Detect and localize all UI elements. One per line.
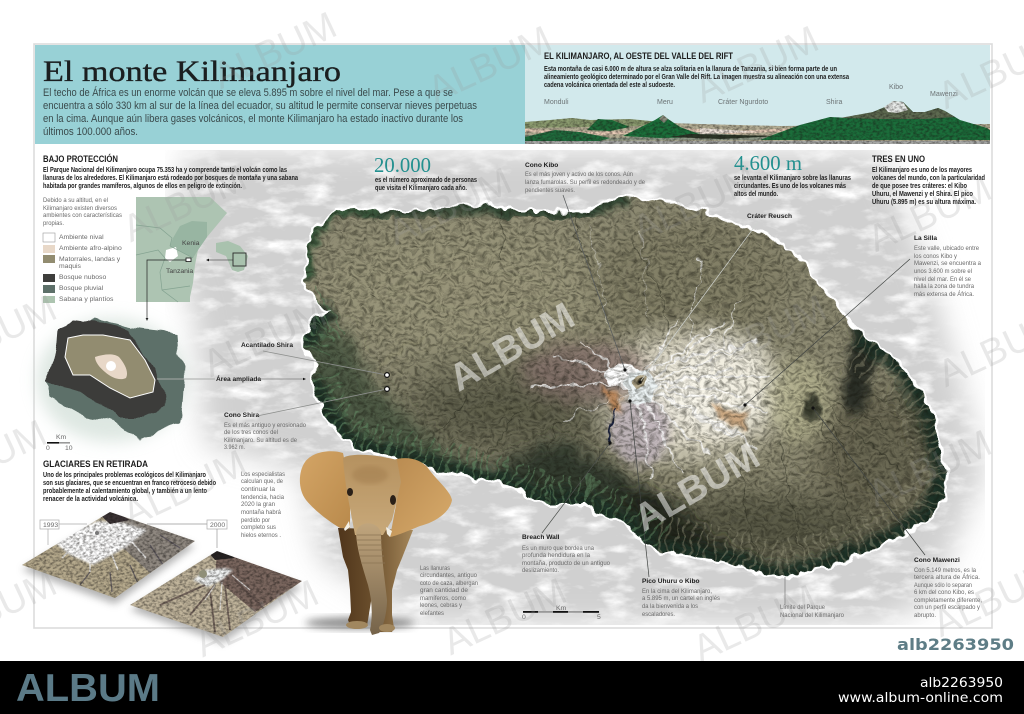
scale: Km zone map: 10 xyxy=(65,445,73,452)
callout: Cono Mawenzi: con un perfil escarpado y xyxy=(914,604,981,611)
footer id and site: www.album-online.com xyxy=(838,690,1003,706)
summit ice cap xyxy=(606,363,655,405)
rift text: Esta montaña de casi 6.000 m de altura se alza solitaria en la llanura de Tanzania, si bien forma parte de un xyxy=(544,66,837,73)
callout: Cono Kibo: lanza fumarolas. Su perfil es redondeado y de xyxy=(525,179,645,186)
text: ambientes intro xyxy=(43,197,123,227)
legend of environments: Bosque nuboso xyxy=(59,274,106,281)
text: surrounding plains: leones, cebras y xyxy=(420,602,463,609)
text: specialists forecast: 2020 la gran xyxy=(241,501,275,508)
rift text: alineamiento geológico determinado por el Gran Valle del Rift. La imagen muestra su alineación con una extensa xyxy=(544,74,849,81)
scale: Km zone map: 0 xyxy=(46,445,50,452)
callout: Cono Shira: de los tres conos del xyxy=(224,429,278,436)
text: surrounding plains: mamíferos, como xyxy=(420,595,466,602)
text: specialists forecast: tendencia, hacia xyxy=(241,494,284,501)
callout: Cono Mawenzi: tercera altura de África. xyxy=(914,572,980,581)
title: El monte Kilimanjaro xyxy=(43,55,341,88)
watermarks: ALBUM xyxy=(697,287,833,381)
text: ambientes intro: propias. xyxy=(43,220,64,227)
watermarks: ALBUM xyxy=(197,292,333,386)
intro text: en la cima. Aunque aún libera gases volcánicos, el monte Kilimanjaro ha estado inactivo durante los xyxy=(43,113,463,125)
intro text: últimos 100.000 años. xyxy=(43,126,138,138)
watermarks: ALBUM xyxy=(627,435,767,540)
stat: 4.600 m height: altos del mundo. xyxy=(734,191,778,198)
text block: Glaciares en retirada: GLACIARES EN RETIRADA xyxy=(43,458,148,469)
callout: Breach Wall: montaña, producto de un antiguo xyxy=(522,560,610,567)
intro text: El techo de África es un enorme volcán que se eleva 5.895 m sobre el nivel del mar. Pese a que se xyxy=(43,86,453,99)
text block: Tres en uno: Uhuru (5.895 m) es su altura máxima. xyxy=(872,199,976,206)
elephant left ear xyxy=(300,451,350,528)
callout: Breach Wall: profunda hendidura en la xyxy=(522,552,590,559)
glacier block 2000 xyxy=(128,550,306,643)
bright snow and lava zone around Kibo xyxy=(580,312,788,476)
watermarks: ALBUM xyxy=(207,4,343,98)
callout: Cono Kibo: Cono Kibo xyxy=(525,162,558,169)
text block: Glaciares en retirada: Uno de los principales problemas ecológicos del Kilimanjaro xyxy=(43,472,206,479)
scale: Km zone map: Km xyxy=(56,434,67,441)
text block: Bajo proteccion xyxy=(43,153,298,190)
callout: Cono Shira xyxy=(224,387,389,451)
text: specialists forecast: montaña habrá xyxy=(241,509,281,516)
footer id and site xyxy=(838,675,1003,706)
tusks and eyes xyxy=(344,521,350,531)
watermarks: ALBUM xyxy=(117,442,253,536)
text: specialists forecast: Los especialistas xyxy=(241,471,286,478)
text: specialists forecast: continuar la xyxy=(241,486,275,493)
callout: Acantilado Shira: Acantilado Shira xyxy=(241,342,293,349)
year labels xyxy=(40,520,227,548)
callout: Breach Wall xyxy=(522,441,612,574)
text: ambientes intro: Debido a su altitud, en el xyxy=(43,197,108,204)
watermarks: ALBUM xyxy=(422,18,558,112)
watermarks: ALBUM xyxy=(862,167,998,261)
rift text: cadena volcánica orientada del este al sudoeste. xyxy=(544,82,675,89)
text block: Tres en uno: volcanes del mundo, con la particularidad xyxy=(872,175,985,182)
text: surrounding plains: gran cantidad de xyxy=(420,587,468,594)
panorama labels: Shira xyxy=(826,99,842,106)
locator map: Kenya and Tanzania: Tanzania xyxy=(166,268,193,275)
callout: Cono Shira: Es el más antiguo y erosionado xyxy=(224,422,306,429)
plains relief background xyxy=(165,150,985,625)
watermarks: ALBUM xyxy=(627,157,763,251)
callout: Pico Uhuru o Kibo: En la cima del Kilimanjaro, xyxy=(642,588,712,595)
callout: Cono Shira: 3.962 m. xyxy=(224,444,245,451)
elephant body and legs xyxy=(338,528,413,632)
callout: La Silla: La Silla xyxy=(914,235,937,242)
callout: Cono Shira: Cono Shira xyxy=(224,412,260,419)
callout: Cono Mawenzi: 6 km del cono Kibo, es xyxy=(914,589,975,596)
stat: 20.000 visitors: 20.000 xyxy=(374,153,431,177)
callout: Cono Mawenzi: Cono Mawenzi xyxy=(914,557,960,564)
legend of environments: Sabana y plantíos xyxy=(59,296,114,303)
text block: Tres en uno xyxy=(872,153,985,206)
callout: Cono Kibo xyxy=(525,162,645,372)
vegetation zone map xyxy=(37,318,187,442)
watermarks: ALBUM xyxy=(382,160,518,254)
watermarks: ALBUM xyxy=(437,570,573,664)
rift heading: EL KILIMANJARO, AL OESTE DEL VALLE DEL RIFT xyxy=(544,50,733,61)
glacier block 1993 xyxy=(20,510,200,604)
callout: Cono Mawenzi: abrupto. xyxy=(914,612,936,619)
text block: Bajo proteccion: habitada por grandes mamíferos, algunos de ellos en peligro de extinción. xyxy=(43,183,242,190)
text: surrounding plains: elefantes xyxy=(420,610,445,617)
callout: La Silla: los conos Kibo y xyxy=(914,253,958,260)
callout: Breach Wall: deslizamiento. xyxy=(522,567,559,574)
watermarks: ALBUM xyxy=(442,295,582,400)
callout: La Silla xyxy=(743,235,981,407)
elephant right ear xyxy=(390,458,452,537)
text block: Glaciares en retirada: renacer de la actividad volcánica. xyxy=(43,496,138,503)
legend of environments xyxy=(43,233,122,303)
callout: Breach Wall: Breach Wall xyxy=(522,534,560,541)
image id label: alb2263950 xyxy=(897,635,1014,654)
panorama labels: Meru xyxy=(657,99,673,106)
text block: Bajo proteccion: llanuras de los alrededores. El Kilimanjaro está rodeado por bosques de montaña y una sabana xyxy=(43,175,298,182)
elephant xyxy=(300,451,452,635)
panel: rift valley xyxy=(525,45,990,144)
text block: Tres en uno: TRES EN UNO xyxy=(872,153,925,164)
scale: Km zone map xyxy=(46,434,73,452)
watermarks: ALBUM xyxy=(117,157,253,251)
callout: Cono Mawenzi: Con 5.149 metros, es la xyxy=(914,567,976,574)
text: specialists forecast: calculan que, de xyxy=(241,478,283,485)
stat: 4.600 m height: se levanta el Kilimanjaro sobre las llanuras xyxy=(734,175,851,182)
callout: park limit: Nacional del Kilimanjaro xyxy=(780,612,844,619)
callout: Crater Reusch: Cráter Reusch xyxy=(747,213,792,220)
watermarks: ALBUM xyxy=(189,572,325,666)
intro text: encuentra a sólo 330 km al sur de la línea del ecuador, su altitud le permite conservar nieves perpetuas xyxy=(43,100,477,112)
callout: Pico Uhuru o Kibo: escaladores. xyxy=(642,611,675,618)
text: specialists forecast xyxy=(241,471,286,539)
callout: Crater Reusch xyxy=(638,213,792,384)
year labels: 1993 xyxy=(43,522,58,529)
stat: 20.000 visitors: que visita el Kilimanjaro cada año. xyxy=(375,185,467,192)
stat: 4.600 m height: circundantes. Es uno de los volcanes más xyxy=(734,183,846,190)
callout: Pico Uhuru o Kibo: Pico Uhuru o Kibo xyxy=(642,578,700,585)
text: surrounding plains xyxy=(420,565,478,617)
stat: 20.000 visitors xyxy=(374,153,477,192)
panorama labels xyxy=(544,84,958,106)
radial snow streaks xyxy=(530,225,770,480)
watermarks: ALBUM xyxy=(689,18,825,112)
locator map: Kenya and Tanzania: Kenia xyxy=(182,240,200,247)
text block: Glaciares en retirada: son sus glaciares, que se encuentran en franco retroceso debido xyxy=(43,480,216,487)
text block: Glaciares en retirada: probablemente al calentamiento global, y también a un lento xyxy=(43,488,207,495)
callout: Area ampliada: Área ampliada xyxy=(216,374,261,383)
callout: Pico Uhuru o Kibo: a 5.895 m, un cartel en inglés xyxy=(642,595,721,602)
footer bar xyxy=(0,661,1024,714)
scale: Km main map: 0 xyxy=(522,614,526,621)
text: specialists forecast: completo sus xyxy=(241,524,277,531)
legend of environments: Ambiente afro-alpino xyxy=(59,245,122,252)
footer id and site: alb2263950 xyxy=(920,675,1003,691)
legend of environments: Ambiente nival xyxy=(59,234,104,241)
edge fringe: forest ridges xyxy=(335,198,628,213)
rift text xyxy=(544,66,849,89)
panorama labels: Cráter Ngurdoto xyxy=(718,99,768,106)
text: surrounding plains: coto de caza, albergan xyxy=(420,580,478,587)
text: specialists forecast: perdido por xyxy=(241,517,271,524)
scale: Km main map: 5 xyxy=(597,614,601,621)
callout: Cono Mawenzi: completamente diferente, xyxy=(914,597,982,604)
callout: La Silla: Mawenzi, se encuentra a xyxy=(914,260,981,267)
satellite image of Kilimanjaro xyxy=(290,190,960,590)
text: surrounding plains: Las llanuras xyxy=(420,565,450,572)
legend of environments: maquis xyxy=(59,263,82,270)
callout: La Silla: nivel del mar. En él se xyxy=(914,276,971,283)
year labels: 2000 xyxy=(210,522,225,529)
callout: Cono Mawenzi xyxy=(811,406,982,619)
stat: 4.600 m height xyxy=(734,151,851,198)
panorama labels: Kibo xyxy=(889,84,903,91)
callout: Breach Wall: Es un muro que bordea una xyxy=(522,545,594,552)
callout: Cono Mawenzi: Aunque sólo lo separan xyxy=(914,582,972,589)
callout: park limit xyxy=(780,577,844,619)
text block: Glaciares en retirada xyxy=(43,458,216,503)
text block: Bajo proteccion: BAJO PROTECCIÓN xyxy=(43,153,118,164)
elephant head xyxy=(343,455,401,535)
footer logo: ALBUM xyxy=(16,667,160,710)
stat: 4.600 m height: 4.600 m xyxy=(734,151,802,175)
callout: Pico Uhuru o Kibo: da la bienvenida a los xyxy=(642,603,699,610)
watermarks: ALBUM xyxy=(862,422,998,516)
callout: La Silla: halla la zona de tundra xyxy=(914,283,974,290)
text: specialists forecast: hielos eternos . xyxy=(241,532,281,539)
panorama labels: Mawenzi xyxy=(930,91,958,98)
callout: park limit: Límite del Parque xyxy=(780,604,825,611)
text block: Tres en uno: Uhuru, el Mawenzi y el Shira. El pico xyxy=(872,191,973,198)
callout: Cono Kibo: pendientes suaves. xyxy=(525,187,575,194)
legend of environments: Bosque pluvial xyxy=(59,285,104,292)
title panel xyxy=(35,45,525,144)
callout: Cono Shira: Kilimanjaro. Su altitud es de xyxy=(224,437,297,444)
scale: Km main map: Km xyxy=(556,605,567,612)
elephant trunk xyxy=(356,523,387,635)
callout: La Silla: unos 3.600 m sobre el xyxy=(914,268,972,275)
panel frame xyxy=(34,44,992,628)
panorama of the volcanic chain xyxy=(525,101,990,144)
scale: Km main map xyxy=(522,605,601,621)
text: ambientes intro: Kilimanjaro existen diversos xyxy=(43,205,118,212)
callout: Pico Uhuru o Kibo xyxy=(628,399,721,618)
callout: Acantilado Shira xyxy=(241,342,389,377)
text block: Tres en uno: El Kilimanjaro es uno de los mayores xyxy=(872,167,972,174)
stat: 20.000 visitors: es el número aproximado de personas xyxy=(375,177,477,184)
callout: La Silla: más extensa de África. xyxy=(914,289,974,298)
text: ambientes intro: ambientes con características xyxy=(43,212,123,219)
intro text xyxy=(43,86,477,138)
text: surrounding plains: circundantes, antiguo xyxy=(420,572,477,579)
legend of environments: Matorrales, landas y xyxy=(59,256,121,263)
callout: Cono Kibo: Es el más joven y activo de los conos. Aún xyxy=(525,171,633,178)
panorama labels: Monduli xyxy=(544,99,569,106)
dark ravines xyxy=(430,212,900,560)
callout: La Silla: Este valle, ubicado entre xyxy=(914,245,979,252)
watermarks: ALBUM xyxy=(687,577,823,671)
locator map: Kenya and Tanzania xyxy=(136,197,248,321)
text block: Bajo proteccion: El Parque Nacional del Kilimanjaro ocupa 75.353 ha y comprende tanto el volcán como las xyxy=(43,167,287,174)
text block: Tres en uno: de que posee tres cráteres: el Kibo xyxy=(872,183,967,190)
